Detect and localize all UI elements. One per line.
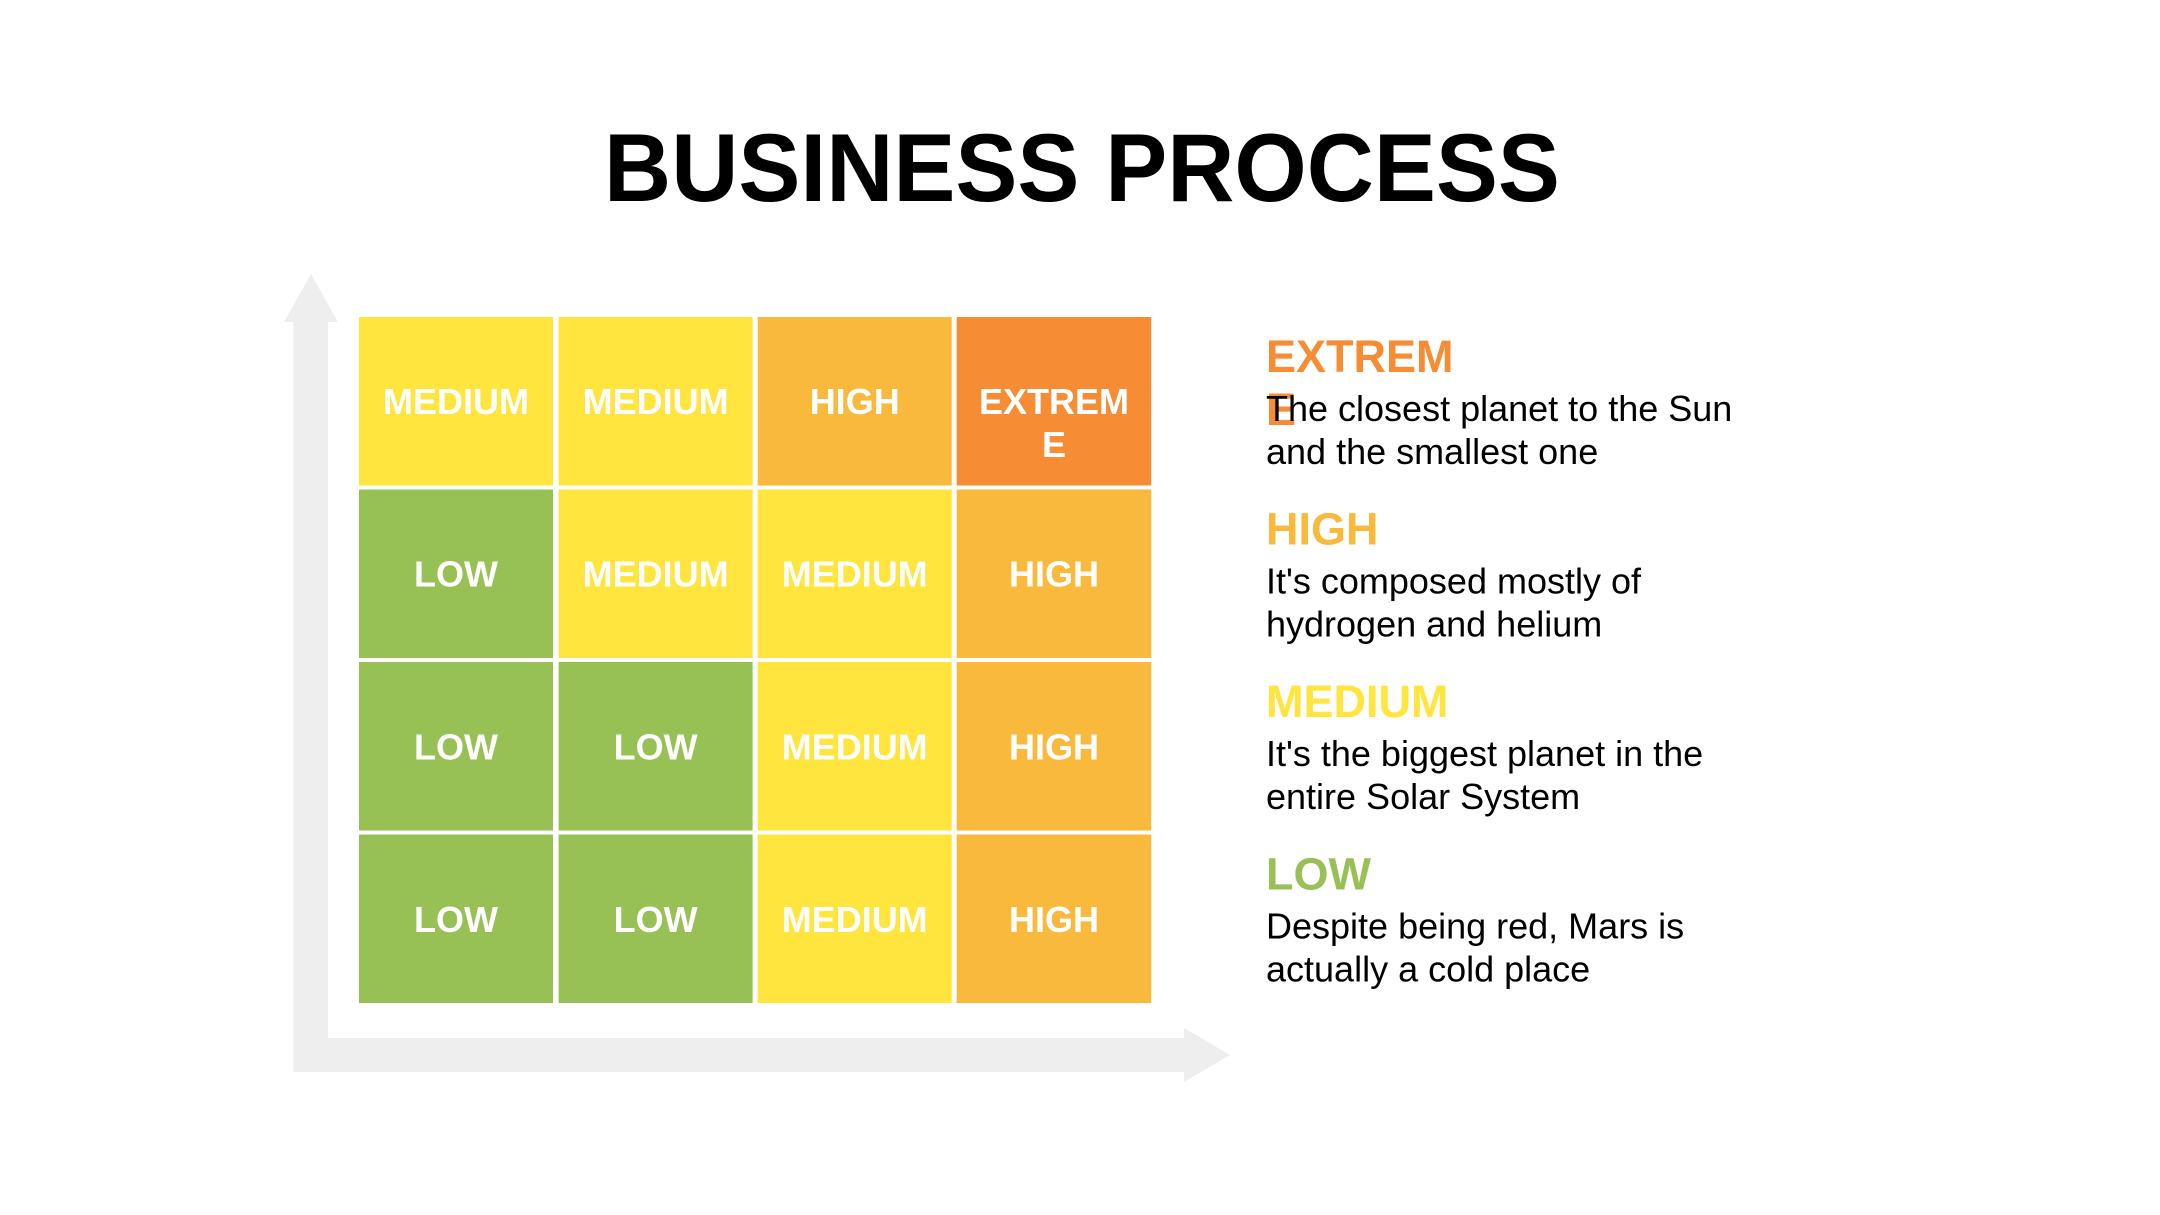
cell: medium xyxy=(758,834,952,1003)
cell: low xyxy=(359,490,553,658)
legend: medium: entire Solar System xyxy=(1266,776,1580,817)
cell: medium xyxy=(359,317,553,486)
legend: medium: MEDIUM xyxy=(1266,676,1448,727)
cell: medium: MEDIUM xyxy=(782,554,928,594)
cell: extreme: E xyxy=(1042,424,1066,465)
cell: low: LOW xyxy=(614,726,698,768)
cell: medium: MEDIUM xyxy=(583,381,729,422)
legend: low xyxy=(1266,848,1684,990)
cell: high: HIGH xyxy=(1009,554,1099,594)
cell: low xyxy=(359,662,553,830)
legend: low: actually a cold place xyxy=(1266,948,1590,990)
cell: low xyxy=(359,834,553,1003)
legend: extreme xyxy=(1266,331,1732,472)
title: BUSINESS PROCESS xyxy=(604,114,1560,222)
cell: low xyxy=(559,662,753,830)
legend: high: hydrogen and helium xyxy=(1266,604,1602,644)
cell: medium xyxy=(758,490,952,658)
legend: low: LOW xyxy=(1266,848,1371,900)
risk matrix xyxy=(359,317,1151,1003)
cell: low: LOW xyxy=(414,554,498,594)
cell: high: HIGH xyxy=(1009,899,1099,940)
cell: medium: MEDIUM xyxy=(383,381,529,422)
legend: high: It's composed mostly of xyxy=(1266,560,1642,602)
legend: extreme: E xyxy=(1266,384,1296,435)
legend: extreme: The closest planet to the Sun xyxy=(1266,388,1732,429)
legend: medium xyxy=(1266,676,1703,817)
legend xyxy=(1266,331,1732,990)
legend: extreme: and the smallest one xyxy=(1266,431,1598,472)
cell: high xyxy=(758,317,952,486)
cell: extreme xyxy=(957,317,1151,486)
legend: extreme: EXTREM xyxy=(1266,331,1454,382)
row 3 xyxy=(359,662,1151,830)
cell: low: LOW xyxy=(414,899,498,940)
cell: high xyxy=(957,662,1151,830)
row 4 xyxy=(359,834,1151,1003)
cell: high: HIGH xyxy=(810,381,900,422)
arrow: horizontal axis xyxy=(294,1028,1230,1082)
cell: low: LOW xyxy=(614,899,698,940)
cell: medium xyxy=(758,662,952,830)
cell: medium: MEDIUM xyxy=(583,554,729,594)
row 1 xyxy=(359,317,1151,486)
cell: medium: MEDIUM xyxy=(782,726,928,768)
row 2 xyxy=(359,490,1151,658)
cell: extreme: EXTREM xyxy=(979,381,1129,422)
legend: medium: It's the biggest planet in the xyxy=(1266,733,1703,774)
cell: high xyxy=(957,490,1151,658)
arrow: vertical axis xyxy=(284,274,338,1072)
cell: medium xyxy=(559,490,753,658)
cell: medium xyxy=(559,317,753,486)
cell: medium: MEDIUM xyxy=(782,899,928,940)
cell: low xyxy=(559,834,753,1003)
legend: high xyxy=(1266,504,1642,644)
legend: low: Despite being red, Mars is xyxy=(1266,906,1684,946)
cell: high: HIGH xyxy=(1009,726,1099,768)
legend: high: HIGH xyxy=(1266,504,1378,554)
cell: low: LOW xyxy=(414,726,498,768)
cell: high xyxy=(957,834,1151,1003)
